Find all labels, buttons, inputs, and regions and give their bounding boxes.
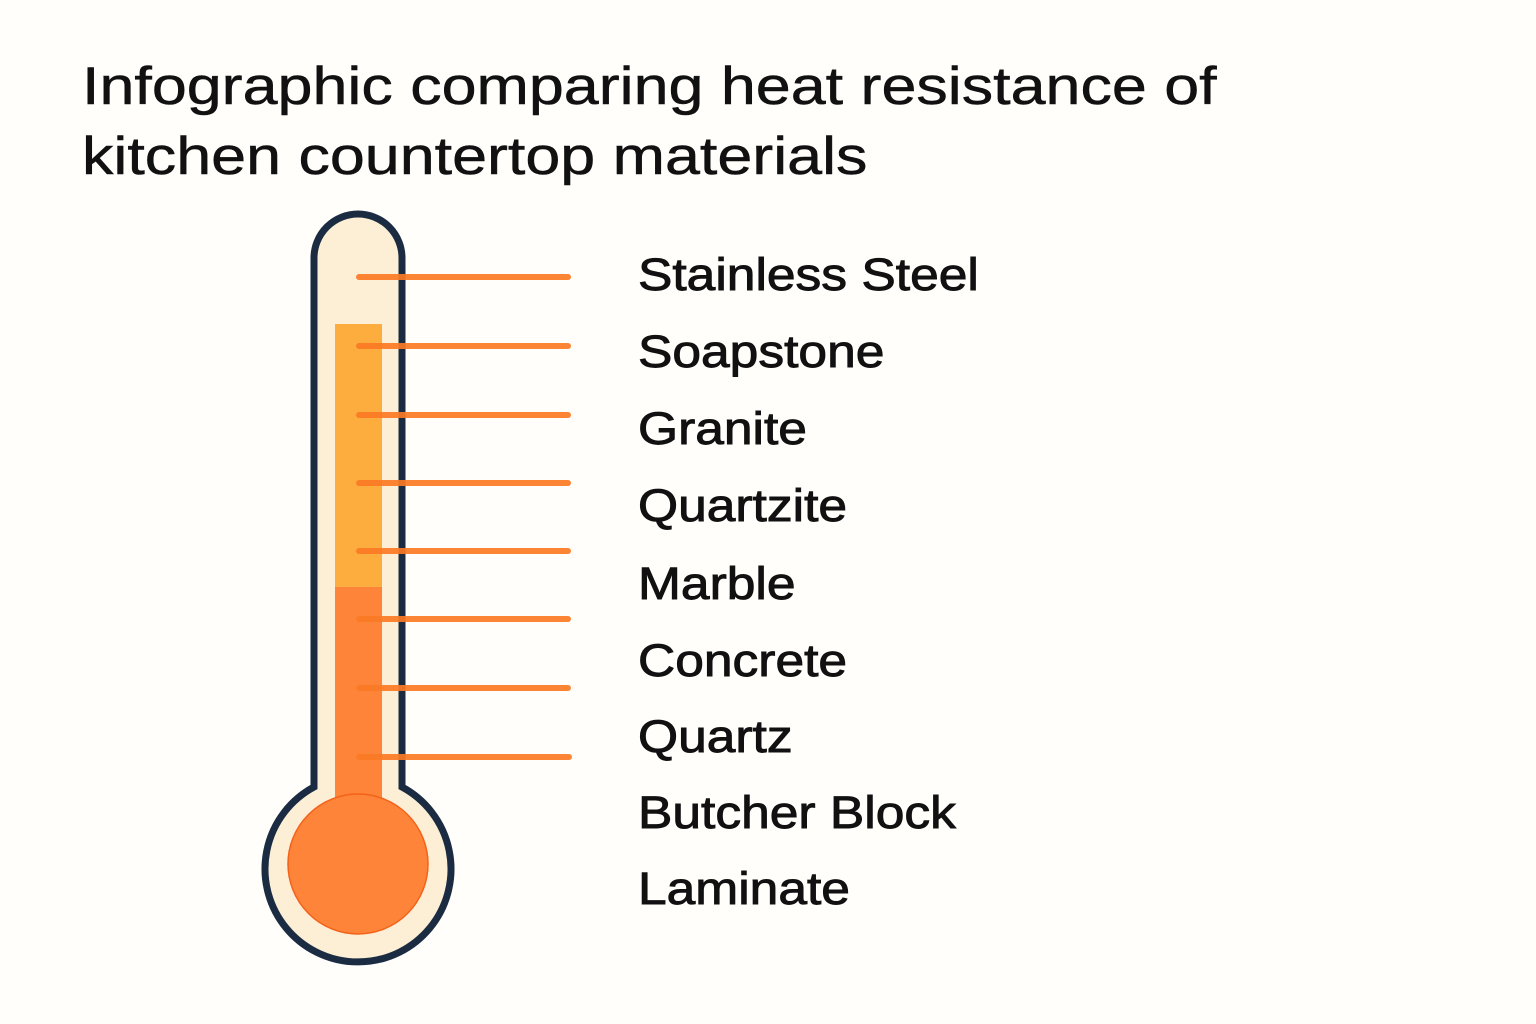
thermometer body [265,214,451,962]
material labels: Quartz [638,711,793,762]
title: kitchen countertop materials [82,127,867,186]
title: Infographic comparing heat resistance of [82,57,1217,116]
tick lines [359,277,569,757]
mercury column [288,324,428,934]
title [82,57,1217,186]
material labels: Laminate [638,863,850,914]
material labels: Concrete [638,635,847,686]
material labels: Marble [638,558,796,609]
material labels: Butcher Block [638,787,956,838]
material labels: Soapstone [638,326,884,377]
material labels: Stainless Steel [638,249,979,300]
material labels: Granite [638,403,807,454]
material labels: Quartzite [638,480,847,531]
material labels [638,249,979,914]
